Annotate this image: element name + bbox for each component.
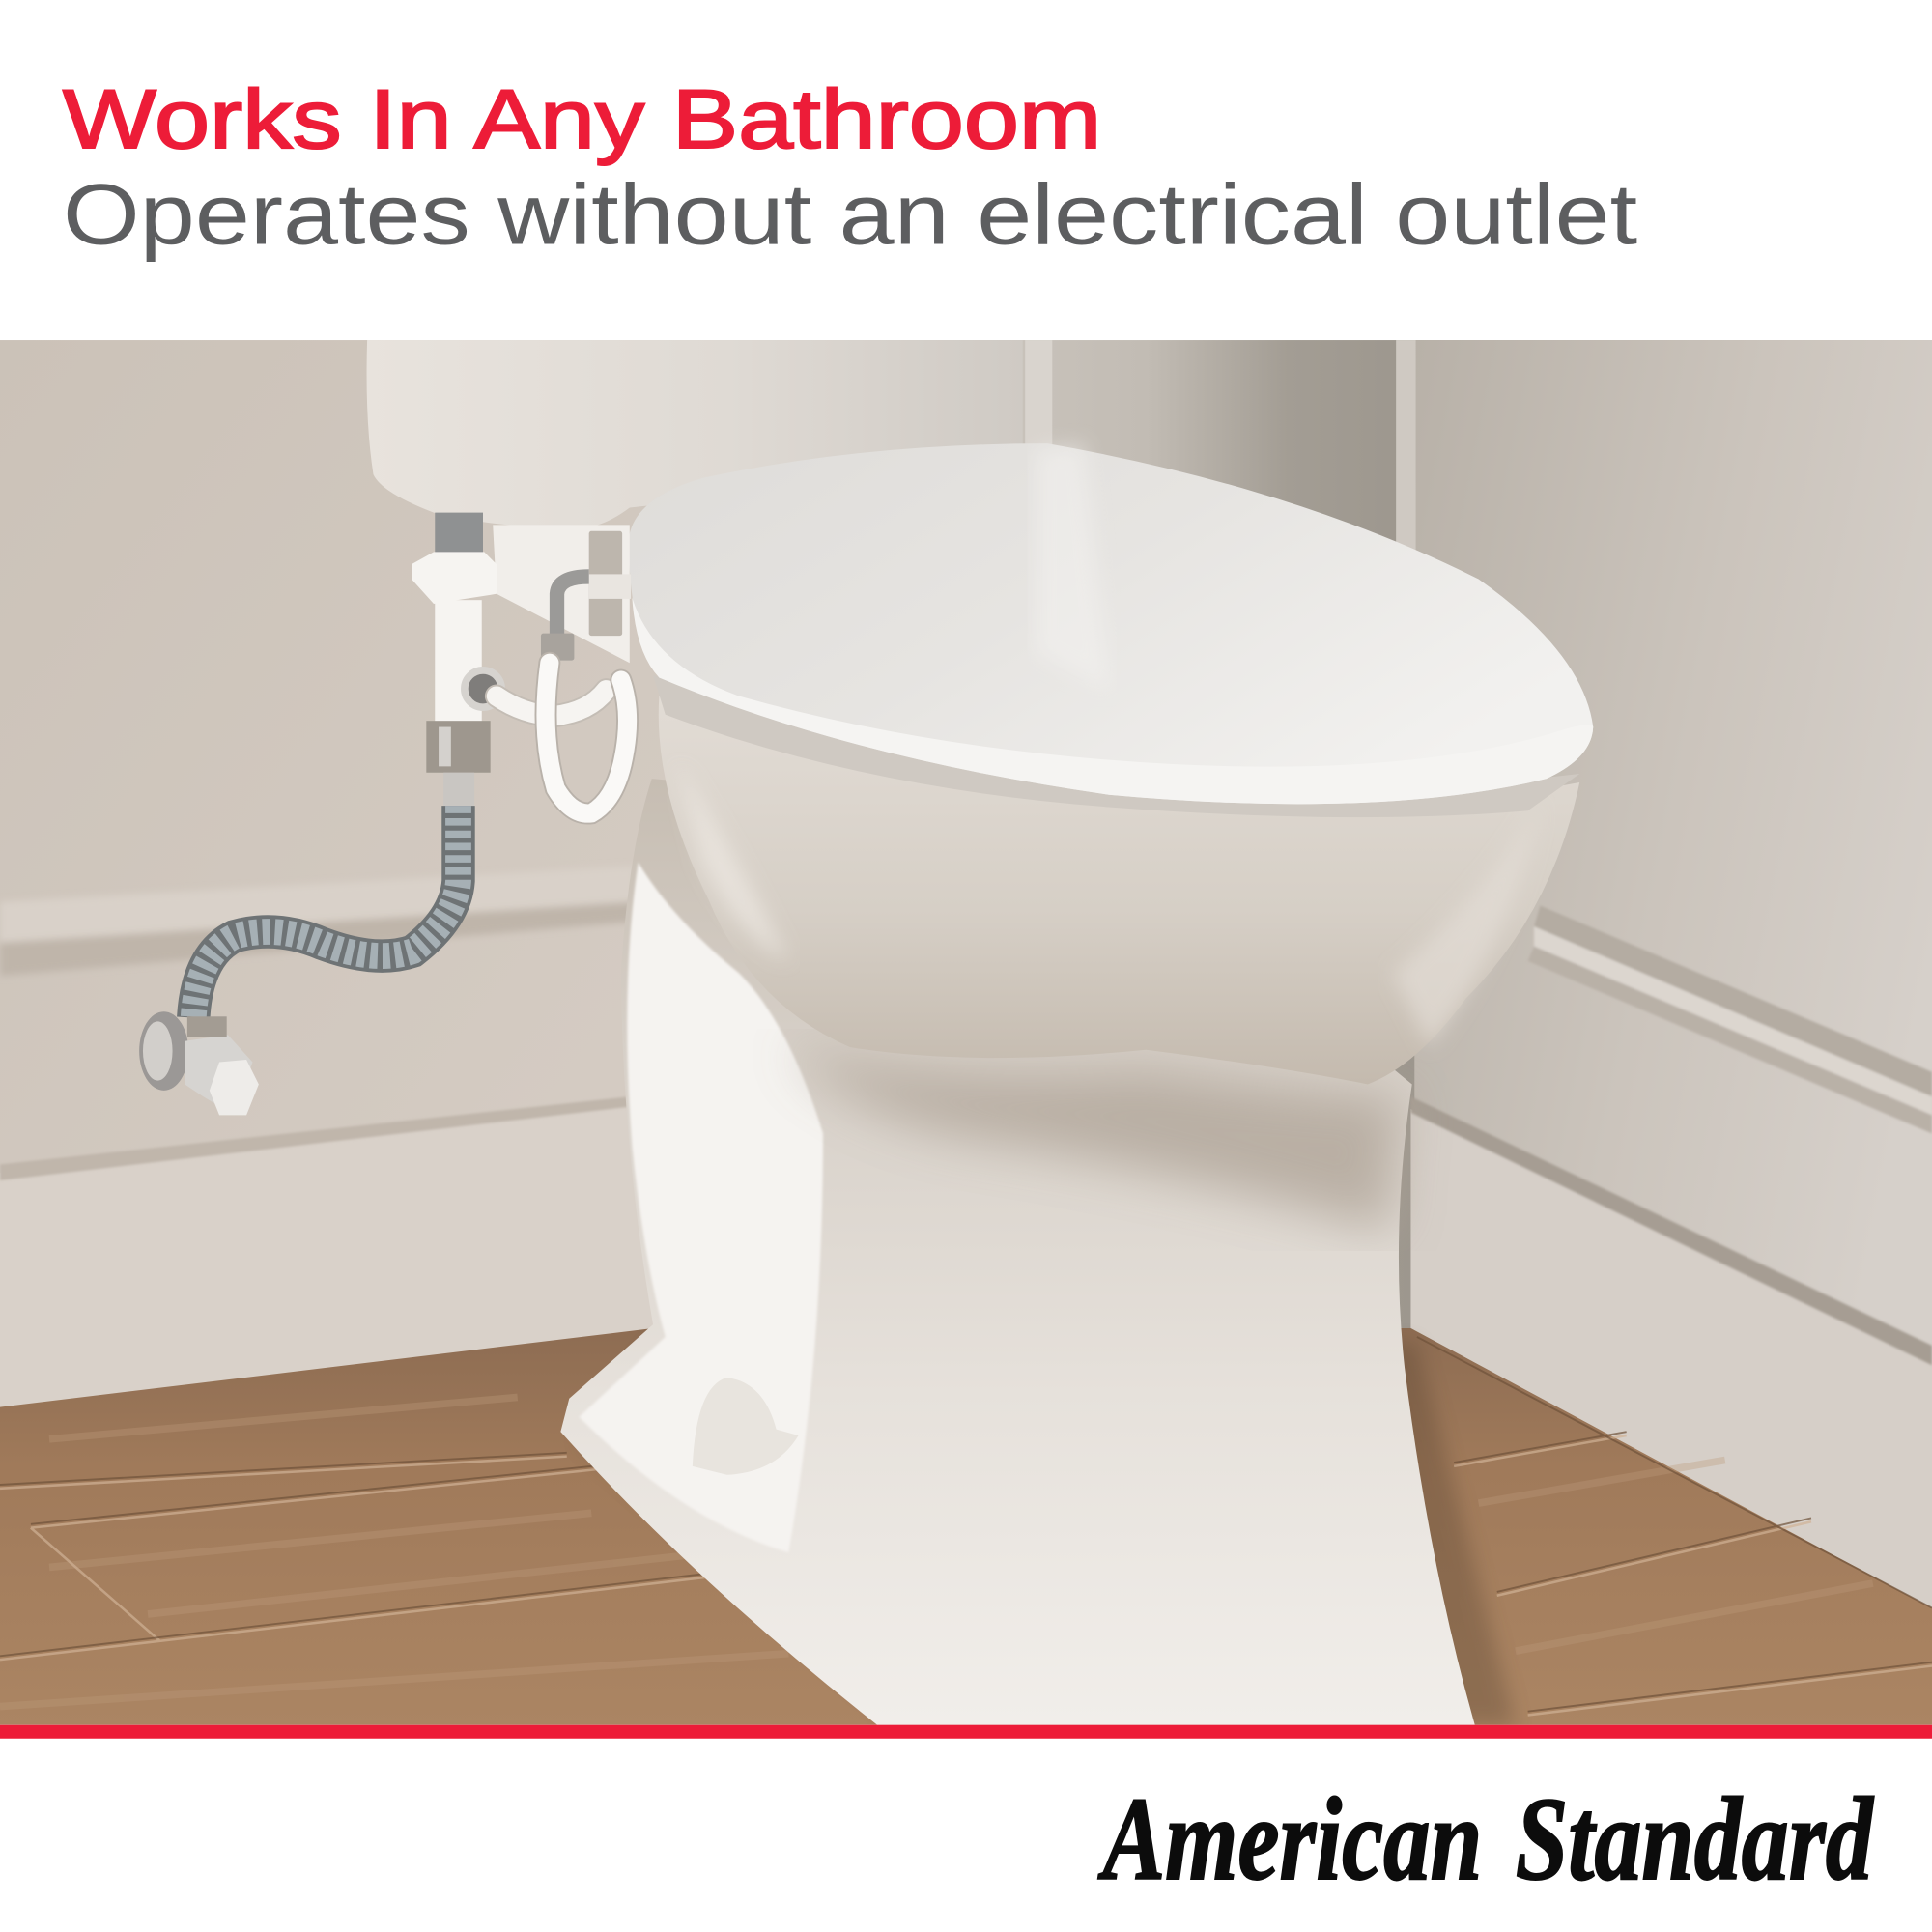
- bowl: [659, 696, 1579, 1084]
- floor shadow: [1403, 1341, 1517, 1725]
- seat ring: [660, 696, 1578, 817]
- chrome elbow: [557, 577, 589, 636]
- centre wall corner: [1022, 340, 1414, 1330]
- logo: American Standard: [1097, 1775, 1874, 1905]
- hinge bracket: [589, 531, 631, 636]
- bolt cap: [693, 1378, 799, 1475]
- tank: [367, 340, 1023, 528]
- braided hose: [193, 806, 458, 1018]
- white T fitting: [412, 552, 497, 724]
- lid edge: [632, 598, 1593, 804]
- grey supply pipe: [435, 513, 483, 558]
- red divider bar: [0, 1725, 1932, 1739]
- left wall: [0, 340, 666, 1407]
- chrome side port: [465, 670, 501, 707]
- subtitle: Operates without an electrical outlet: [63, 166, 1637, 263]
- right baseboard: [1410, 1097, 1932, 1445]
- title: Works In Any Bathroom: [63, 72, 1101, 166]
- logo: American Standard: American: [1097, 1775, 1482, 1905]
- chrome nut: [541, 634, 574, 661]
- chrome coupling: [426, 721, 491, 807]
- door trim: [1025, 340, 1416, 550]
- shut-off valve: [139, 1011, 259, 1115]
- bowl reflection: [1397, 871, 1511, 1041]
- lid: [629, 443, 1593, 804]
- right wall: [1414, 340, 1932, 1627]
- right chair rail: [1528, 906, 1932, 1133]
- pedestal shadow: [788, 1047, 1405, 1233]
- white bidet hose: [497, 663, 628, 813]
- left baseboard: [0, 1094, 653, 1407]
- pedestal left highlight: [579, 863, 823, 1552]
- lid sheen: [1045, 440, 1089, 585]
- bowl left highlight: [692, 806, 781, 952]
- toilet pedestal: [560, 779, 1475, 1725]
- left chair rail: [0, 867, 635, 976]
- wood floor: [0, 1328, 1932, 1725]
- photo: toilet in bathroom: [0, 340, 1932, 1725]
- white mounting block: [493, 525, 630, 663]
